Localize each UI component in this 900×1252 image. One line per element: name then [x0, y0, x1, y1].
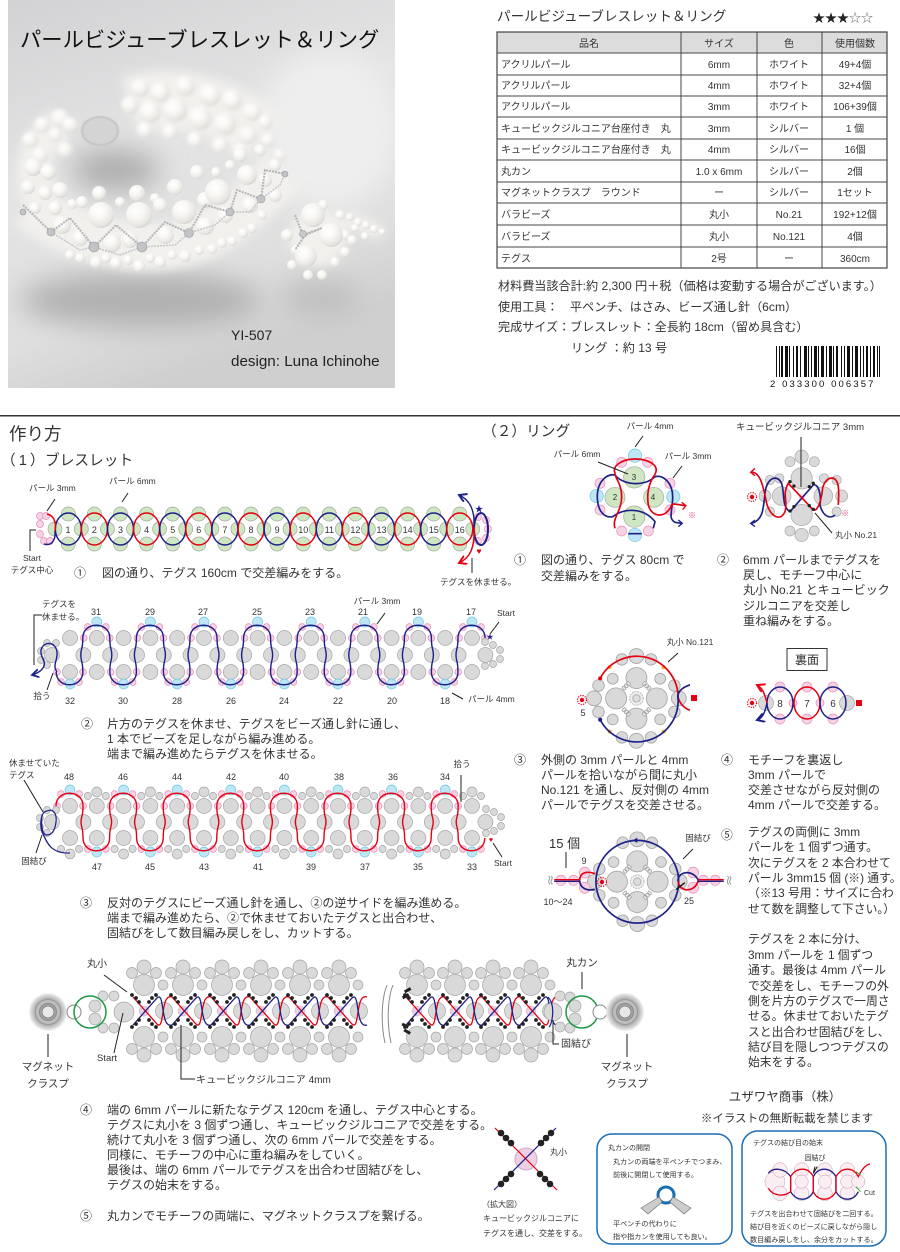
materials table: 4mm — [708, 81, 730, 92]
materials table: 2個 — [847, 165, 863, 178]
panel: opening jump ring: 平ペンチの代わりに — [613, 1219, 677, 1228]
photo title: パールビジューブレスレット＆リング — [20, 28, 379, 52]
step 3 text: 反対のテグスにビーズ通し針を通し、②の逆サイドを編み進める。 — [107, 895, 466, 910]
numbers row 3: 47 — [92, 862, 102, 872]
numbers row 3: 41 — [253, 862, 263, 872]
materials table: キュービックジルコニア台座付き 丸 — [501, 143, 671, 156]
right clasp and ring — [555, 991, 644, 1033]
enlarged crossing diagram — [482, 1128, 587, 1238]
break mark — [382, 985, 393, 1043]
heading: product name: パールビジューブレスレット＆リング — [497, 8, 727, 24]
numbers row 2: 21 — [358, 607, 368, 617]
ring step 1 text: 図の通り、テグス 80cm で — [541, 553, 685, 567]
bead numbers: 3 — [118, 525, 123, 535]
knot diagram — [765, 1163, 870, 1201]
icon: pliers and ring — [641, 1187, 691, 1214]
bracelet: front pearls — [21, 144, 282, 272]
panel: finishing the knot: 数目編み戻しをし、余分をカットする。 — [750, 1235, 878, 1244]
diagram: ring step 1: パール 4mm — [627, 421, 673, 431]
numbers row 3: 46 — [118, 772, 128, 782]
diagram: ring step 1: パール 6mm — [554, 449, 600, 459]
materials table: 使用個数 — [835, 37, 875, 50]
numbers row 2: 22 — [333, 696, 343, 706]
ring step 5 text: せる。休ませておいたテグ — [748, 1009, 889, 1023]
step 2 text — [81, 716, 406, 761]
numbers row 3: 43 — [199, 862, 209, 872]
step 4 text: テグスに丸小を 3 個ずつ通し、キュービックジルコニアで交差をする。 — [107, 1118, 492, 1132]
panel: opening jump ring: 丸カンの両端を平ペンチでつまみ、 — [613, 1157, 726, 1166]
step 4 text — [80, 1102, 492, 1192]
numbers row 3: 42 — [226, 772, 236, 782]
materials table: 32+4個 — [839, 79, 871, 92]
materials table: 4mm — [708, 145, 730, 156]
heading: bracelet: ブレスレット — [45, 451, 133, 469]
ring step 5 text: で交差をし、モチーフの外 — [748, 979, 889, 993]
diagram: ring step 1: 4 — [651, 493, 656, 502]
materials table: キュービックジルコニア台座付き 丸 — [501, 122, 671, 135]
diagram: ring step 2: 丸小 No.21 — [835, 530, 877, 540]
numbers row 2: 24 — [279, 696, 289, 706]
enlarged crossing diagram: キュービックジルコニアに — [483, 1214, 579, 1223]
materials table: 3mm — [708, 124, 730, 135]
diagram: ring step 1: 3 — [632, 473, 637, 482]
materials table: 16個 — [844, 143, 866, 156]
diagram: ring step 5: 15 個 — [549, 836, 580, 851]
panel: product photo — [8, 0, 400, 388]
navy thread wave — [56, 625, 485, 685]
labels step 4: マグネット — [22, 1060, 74, 1073]
labels step 4: クラスプ — [27, 1078, 69, 1090]
numbers row 3: 33 — [467, 862, 477, 872]
materials table: 192+12個 — [833, 208, 877, 221]
ring — [281, 200, 386, 280]
motifs left section — [126, 960, 368, 1062]
materials table: 360cm — [840, 254, 870, 265]
labels row 2: 拾う — [33, 691, 51, 701]
thread end loop — [32, 643, 57, 675]
product code: YI-507 — [231, 327, 272, 343]
numbers row 2: 18 — [440, 696, 450, 706]
ring step 5 text — [721, 825, 900, 1069]
labels row 1: パール 3mm — [29, 483, 76, 493]
ring step 5 text: せて数を調整して下さい。） — [748, 902, 895, 916]
step 1 text: 図の通り、テグス 160cm で交差編みをする。 — [102, 566, 348, 580]
materials table: アクリルパール — [501, 101, 570, 113]
labels row 3: 拾う — [453, 759, 471, 769]
ring step 4 text: 4mm パールで交差する。 — [748, 798, 886, 812]
ring step 4 text: ④ — [721, 753, 733, 767]
left clasp and ring — [29, 991, 134, 1033]
numbers row 2: 23 — [305, 607, 315, 617]
bead numbers: 1 — [65, 525, 71, 535]
ring step 2 text: 戻し、モチーフ中心に — [743, 567, 862, 582]
labels row 1: パール 6mm — [109, 476, 156, 486]
heading: bracelet: （1） — [1, 452, 48, 469]
ring step 5 text: パール 3mm15 個 (※) 通す。 — [748, 871, 900, 885]
bead numbers: 16 — [455, 525, 465, 535]
materials table: 丸小 — [709, 208, 729, 221]
labels step 4: マグネット — [601, 1060, 653, 1073]
panel: opening jump ring: 前後に開閉して使用する。 — [613, 1170, 698, 1179]
step 4 text: 最後は、端の 6mm パールでテグスを出合わせ固結びをし、 — [107, 1163, 428, 1177]
numbers row 2: 27 — [198, 607, 208, 617]
labels row 3: Start — [494, 858, 513, 868]
beads row 2 — [38, 617, 504, 689]
diagram: ring step 2 — [736, 422, 877, 542]
diagram: ring step 5: 10～24 — [543, 897, 573, 907]
materials table: バラビーズ — [501, 230, 550, 243]
step 2 text: 片方のテグスを休ませ、テグスをビーズ通し針に通し、 — [107, 716, 406, 731]
ring step 3 text: 外側の 3mm パールと 4mm — [541, 753, 688, 767]
motifs right section — [400, 960, 562, 1062]
labels row 1: ♥ — [476, 546, 482, 556]
diagram: step 3 bracelet weave — [9, 758, 513, 872]
ring step 4 text: 3mm パールで — [748, 768, 826, 782]
step 5 text: ⑤ — [80, 1209, 92, 1223]
materials table: マグネットクラスプ ラウンド — [501, 186, 641, 199]
ring step 2 text: ジルコニアを交差し — [743, 599, 851, 613]
step 2 text: 1 本でビーズを足しながら編み進める。 — [107, 731, 320, 746]
bead numbers: 15 — [429, 525, 439, 535]
crossed loops 1 to 16 — [44, 495, 488, 563]
left end loop — [41, 810, 70, 853]
bead numbers: 9 — [275, 525, 280, 535]
numbers row 3: 44 — [172, 772, 182, 782]
materials table: アクリルパール — [501, 80, 570, 92]
labels row 2: パール 4mm — [468, 694, 515, 704]
diagram: ring step 1: 2 — [613, 493, 618, 502]
diagram: ring step 5: 25 — [684, 896, 694, 906]
ring step 5 text: 側を片方のテグスで一周さ — [748, 994, 890, 1008]
diagram: step 4 bracelet assembly — [22, 956, 653, 1090]
designer credit: design: Luna Ichinohe — [231, 353, 380, 370]
panel: opening jump ring — [597, 1134, 732, 1244]
barcode — [770, 346, 880, 390]
ring step 4 text — [721, 753, 886, 812]
labels row 2: パール 3mm — [354, 596, 400, 606]
materials table: ホワイト — [769, 101, 809, 113]
materials table: 106+39個 — [833, 100, 877, 113]
ring step 3 text — [514, 753, 709, 812]
ring step 5 text: テグスを 2 本に分け、 — [748, 932, 867, 946]
diagram: ring step 4: 6 — [830, 699, 836, 710]
panel: finishing the knot: Cut — [864, 1190, 875, 1197]
materials table: No.121 — [773, 232, 806, 243]
numbers row 2: 20 — [387, 696, 397, 706]
diagram: ring step 3 — [578, 637, 714, 748]
panel: finishing the knot: 結び目を近くのビーズに戻しながら隠し — [750, 1222, 877, 1231]
ring step 2 text — [717, 553, 890, 628]
ring step 4 text: モチーフを裏返し — [748, 753, 843, 767]
numbers row 3: 35 — [413, 862, 423, 872]
ring step 4 text: 交差させながら反対側の — [748, 782, 880, 797]
panel: finishing the knot — [742, 1131, 886, 1246]
step 1 text: ① — [74, 566, 86, 580]
labels row 3: ♥ — [489, 837, 493, 844]
bracelet: back band blurred — [22, 76, 286, 163]
diagram: ring step 2: ※ — [841, 509, 849, 518]
numbers row 3: 40 — [279, 772, 289, 782]
materials table: ホワイト — [769, 59, 809, 71]
materials table: 1.0 x 6mm — [696, 167, 742, 178]
ring step 5 text: スと出合わせ固結びをし、 — [748, 1025, 890, 1039]
diagram: ring step 5: 9 — [581, 856, 587, 866]
labels row 2: ★ — [486, 633, 494, 641]
materials and size notes: リング ：約 13 号 — [571, 340, 667, 355]
materials table: 丸小 — [709, 230, 729, 243]
numbers row 2: 19 — [412, 607, 422, 617]
ring step 5 text: 始末をする。 — [748, 1055, 819, 1069]
bracelet: silver lines and rhinestones — [20, 170, 288, 255]
materials table: 丸カン — [501, 165, 531, 178]
materials table: シルバー — [769, 187, 809, 199]
diagram: ring step 1: パール 3mm — [665, 451, 711, 461]
ring step 3 text: No.121 を通し、反対側の 4mm — [541, 783, 709, 797]
numbers row 3: 38 — [334, 772, 344, 782]
diagram: step 1 bracelet row — [11, 476, 516, 587]
step 3 text: 端まで編み進めたら、②で休ませておいたテグスと出合わせ、 — [107, 911, 442, 925]
barcode: 2 033300 006357 — [770, 379, 875, 390]
ring step 5 text: 通す。最後は 4mm パール — [748, 963, 886, 977]
materials table: 49+4個 — [839, 58, 871, 71]
labels row 2: 休ませる。 — [42, 612, 84, 622]
materials table: 色 — [784, 38, 794, 50]
diagram: ring step 3: 5 — [580, 708, 586, 718]
diagram: ring step 3: 丸小 No.121 — [667, 637, 714, 647]
ring step 5 text: 結び目を隠しつつテグスの — [748, 1040, 889, 1054]
labels step 4: クラスプ — [606, 1078, 648, 1090]
label: reverse side: 裏面 — [795, 653, 819, 667]
labels row 1: ★ — [475, 504, 484, 514]
step 4 text: 同様に、モチーフの中心に重ね編みをしていく。 — [107, 1147, 370, 1162]
panel: opening jump ring: 丸カンの開閉 — [608, 1143, 650, 1152]
company name: ユザワヤ商事（株） — [729, 1089, 841, 1104]
labels row 3 — [9, 758, 513, 868]
copyright note: ※イラストの無断転載を禁じます — [701, 1111, 873, 1125]
materials table: 6mm — [708, 60, 730, 71]
panel: opening jump ring: 指や指カンを使用しても良い。 — [613, 1232, 712, 1241]
bead numbers: 12 — [350, 525, 360, 535]
labels step 4 — [22, 956, 653, 1090]
ring step 2 text: ② — [717, 553, 729, 567]
materials table: No.21 — [776, 210, 803, 221]
materials table: 4個 — [847, 230, 863, 243]
labels row 3: 休ませていた — [9, 758, 60, 768]
numbers row 2: 30 — [118, 696, 128, 706]
materials table: サイズ — [704, 37, 734, 50]
ring step 2 text: 丸小 No.21 とキュービック — [743, 583, 890, 597]
ring step 1 text: 交差編みをする。 — [541, 569, 637, 583]
materials table: 2号 — [711, 253, 727, 265]
materials and size notes: 材料費当該合計:約 2,300 円＋税（価格は変動する場合がございます。） — [498, 278, 882, 293]
materials and size notes — [498, 278, 882, 355]
panel: finishing the knot: 固結び — [804, 1153, 826, 1162]
labels row 2 — [33, 596, 516, 704]
labels row 3: 固結び — [21, 856, 47, 866]
materials table: ホワイト — [769, 80, 809, 92]
labels step 4: 固結び — [561, 1037, 591, 1050]
numbers row 2 — [65, 607, 476, 706]
labels row 1: Start — [23, 553, 42, 563]
ring step 5 text: （※13 号用：サイズに合わ — [748, 886, 894, 900]
numbers row 3: 36 — [388, 772, 398, 782]
heading: ring: （２）リング — [482, 423, 570, 440]
diagram: ring step 4 — [748, 682, 862, 724]
bead numbers: 14 — [403, 525, 413, 535]
red thread wave — [56, 793, 485, 851]
step 5 text: 丸カンでモチーフの両端に、マグネットクラスプを繋げる。 — [107, 1208, 430, 1223]
labels row 1 — [11, 476, 516, 587]
step 4 text: 続けて丸小を 3 個ずつ通し、次の 6mm パールで交差をする。 — [107, 1133, 442, 1147]
materials table: バラビーズ — [501, 208, 550, 221]
ring step 5 text: 3mm パールを 1 個ずつ — [748, 948, 873, 962]
numbers row 2: 28 — [172, 696, 182, 706]
ring step 2 text: 重ね編みをする。 — [743, 614, 839, 628]
step 3 text: 固結びをして数目編み戻しをし、カットする。 — [107, 925, 359, 940]
materials and size notes: 平ペンチ、はさみ、ビーズ通し針（6cm） — [570, 299, 797, 314]
ring step 5 text: パールを 1 個ずつ通す。 — [748, 840, 878, 854]
numbers row 2: 32 — [65, 696, 75, 706]
materials table: ー — [714, 188, 724, 199]
diagram: ring step 1: 1 — [632, 513, 637, 522]
ring step 3 text: パールでテグスを交差させる。 — [541, 798, 709, 812]
materials and size notes: 使用工具： — [498, 299, 558, 314]
beads row 1 — [36, 507, 492, 551]
bead numbers: 10 — [298, 525, 308, 535]
materials table: 1セット — [837, 187, 873, 199]
bead numbers: 8 — [248, 525, 254, 535]
diagram: step 2 bracelet weave — [32, 596, 516, 706]
step 4 text: ④ — [80, 1103, 92, 1117]
labels row 1: テグスを休ませる。 — [440, 577, 516, 587]
step 2 text: ② — [81, 717, 93, 731]
materials table: 品名 — [579, 37, 599, 50]
labels step 4: Start — [97, 1053, 117, 1064]
numbers row 3: 34 — [440, 772, 450, 782]
diagram: ring step 2: キュービックジルコニア 3mm — [736, 422, 864, 433]
panel: finishing the knot: テグスの結び目の始末 — [753, 1138, 823, 1147]
ring step 5 text: テグスの両側に 3mm — [748, 825, 860, 839]
ring step 3 text: パールを拾いながら間に丸小 — [541, 767, 697, 782]
materials and size notes: ブレスレット：全長約 18cm（留め具含む） — [570, 319, 809, 334]
bead numbers: 2 — [92, 525, 97, 535]
enlarged crossing diagram: 丸小 — [550, 1147, 568, 1157]
materials and size notes: 完成サイズ： — [498, 319, 570, 334]
bead numbers: 5 — [170, 525, 175, 535]
bead numbers — [65, 525, 465, 535]
materials table — [497, 32, 887, 268]
ring step 1 text: ① — [514, 553, 526, 567]
numbers row 3: 39 — [306, 862, 316, 872]
ring step 5 text: 次にテグスを 2 本合わせて — [748, 856, 891, 870]
ring step 1 text — [514, 553, 685, 583]
ring step 3 text: ③ — [514, 753, 526, 767]
numbers row 3: 45 — [145, 862, 155, 872]
labels row 2: テグスを — [42, 599, 76, 609]
labels row 1: テグス中心 — [11, 565, 54, 575]
numbers row 3 — [64, 772, 477, 872]
materials table: ー — [784, 254, 794, 265]
numbers row 3: 48 — [64, 772, 74, 782]
step 4 text: 端の 6mm パールに新たなテグス 120cm を通し、テグス中心とする。 — [107, 1102, 483, 1117]
labels step 4: キュービックジルコニア 4mm — [196, 1074, 331, 1086]
step 3 text: ③ — [80, 896, 92, 910]
bead numbers: 4 — [144, 525, 149, 535]
bead numbers: 7 — [222, 525, 227, 535]
bead numbers: 13 — [376, 525, 387, 535]
bead numbers: 6 — [196, 525, 201, 535]
materials table: シルバー — [769, 123, 809, 135]
materials table: シルバー — [769, 166, 809, 178]
step 2 text: 端まで編み進めたらテグスを休ませる。 — [107, 747, 323, 761]
label: reverse side — [787, 648, 827, 670]
step 3 text — [80, 895, 466, 940]
numbers row 3: 37 — [360, 862, 370, 872]
step 4 text: テグスの始末をする。 — [107, 1178, 227, 1192]
labels row 3: テグス — [9, 770, 35, 780]
diagram: ring step 5: 固結び — [685, 833, 711, 843]
numbers row 2: 26 — [226, 696, 236, 706]
bracelet: white backdrop — [30, 100, 383, 260]
difficulty stars: ★★★☆☆ — [813, 11, 873, 25]
diagram: ring step 1: ※ — [688, 511, 696, 520]
numbers row 2: 29 — [145, 607, 155, 617]
divider — [0, 415, 900, 416]
materials table: テグス — [501, 252, 531, 265]
diagram: ring step 4: 8 — [777, 699, 783, 710]
materials table: アクリルパール — [501, 59, 570, 71]
beads row 3 — [36, 785, 504, 859]
enlarged crossing diagram: テグスを通し、交差をする。 — [483, 1228, 587, 1238]
diagram: ring step 4: 7 — [804, 699, 810, 710]
numbers row 2: 25 — [252, 607, 262, 617]
diagram: ring step 5 — [543, 832, 731, 932]
ring step 2 text: 6mm パールまでテグスを — [743, 553, 881, 567]
materials table: シルバー — [769, 144, 809, 156]
diagram: ring step 1 — [554, 421, 711, 542]
materials table: 1 個 — [846, 122, 864, 135]
labels step 4: 丸小 — [87, 957, 107, 970]
labels step 4: 丸カン — [566, 956, 598, 969]
ring step 5 text: ⑤ — [721, 828, 733, 842]
numbers row 2: 31 — [91, 607, 101, 617]
materials table: 3mm — [708, 102, 730, 113]
heading: how to make: 作り方 — [9, 424, 62, 444]
numbers row 2: 17 — [466, 607, 476, 617]
labels row 2: Start — [497, 608, 516, 618]
panel: finishing the knot: テグスを出合わせて固結びを二回する。 — [750, 1209, 878, 1218]
bead numbers: 11 — [325, 525, 334, 535]
enlarged crossing diagram: （拡大図） — [482, 1199, 522, 1209]
